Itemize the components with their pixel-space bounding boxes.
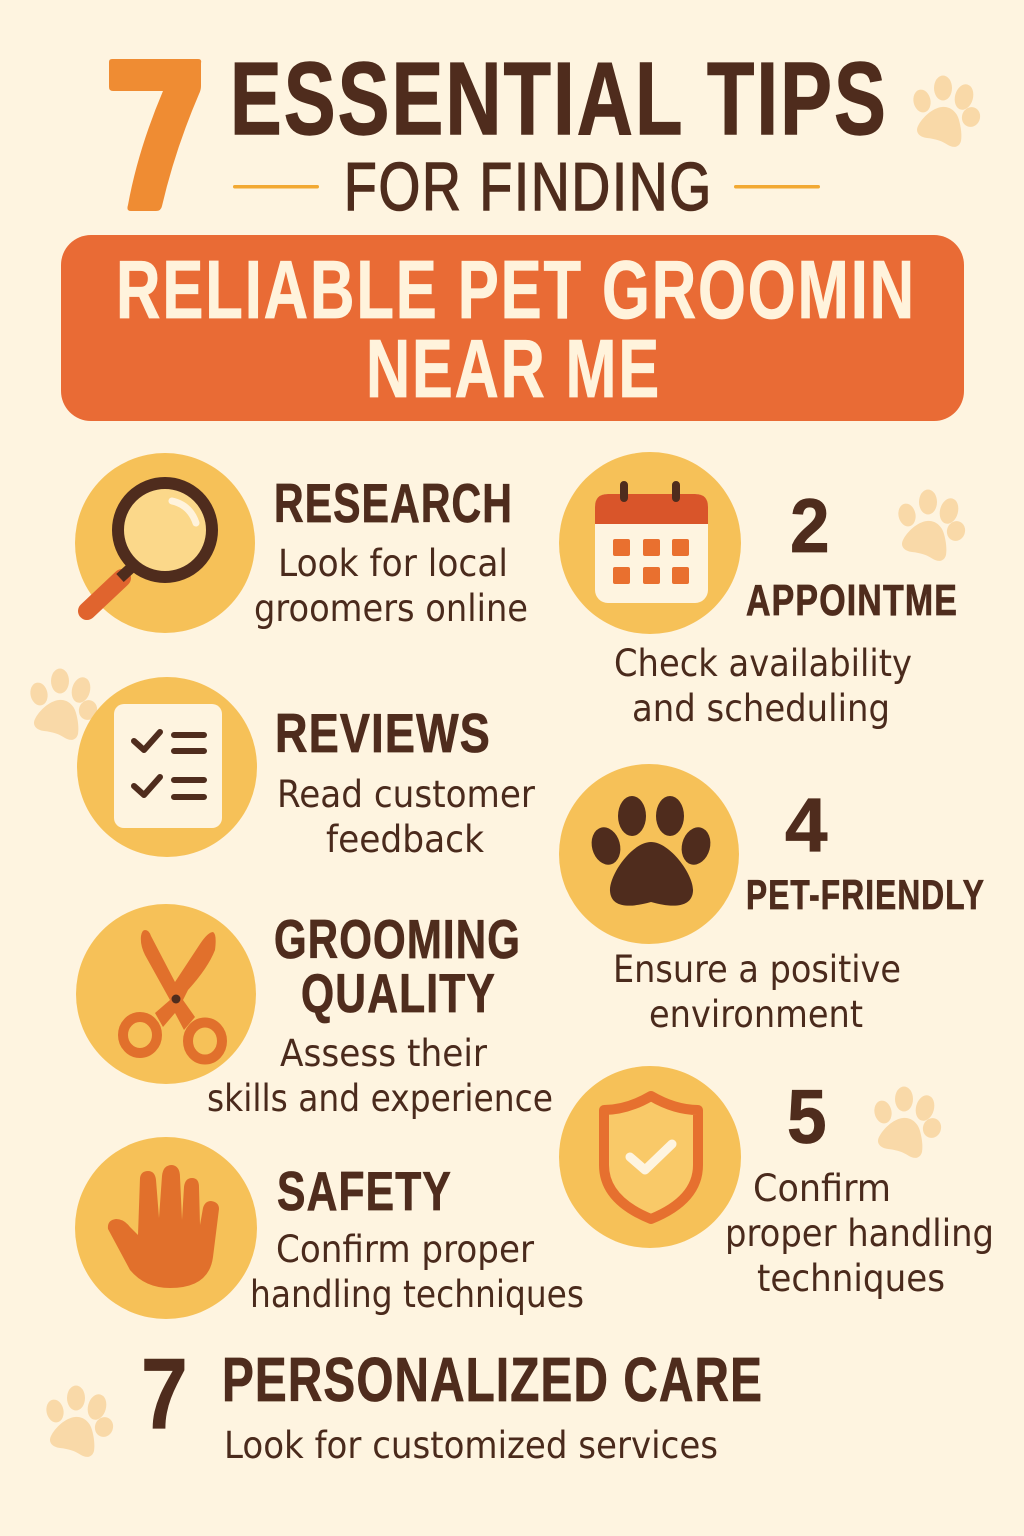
- description: Check availability: [614, 642, 912, 685]
- description: techniques: [757, 1257, 945, 1300]
- tip 4: pet-friendly: [559, 764, 985, 1036]
- heading: RESEARCH: [274, 472, 513, 534]
- tip: safety: [75, 1137, 584, 1319]
- subtitle: for finding: FOR FINDING: [344, 149, 713, 225]
- description: Confirm proper: [276, 1228, 535, 1271]
- decorative paw: right top: [896, 490, 968, 561]
- icon: hand: [75, 1137, 257, 1319]
- number: 4: [785, 783, 829, 868]
- number: 7: [141, 1338, 189, 1450]
- description: skills and experience: [207, 1077, 553, 1120]
- icon: checklist: [77, 677, 257, 857]
- big orange numeral 7: [109, 59, 201, 211]
- heading: APPOINTME: [746, 576, 958, 625]
- tip: grooming quality: QUALITY: [301, 962, 496, 1024]
- description: feedback: [326, 818, 485, 861]
- icon: shield: [559, 1066, 741, 1248]
- icon: calendar: [559, 452, 741, 634]
- tip 2: appointment: [559, 452, 958, 730]
- icon: scissors: [76, 904, 256, 1084]
- heading: GROOMING: [274, 908, 521, 970]
- description: handling techniques: [250, 1273, 584, 1316]
- banner: reliable pet grooming near me: NEAR ME: [366, 322, 661, 415]
- description: and scheduling: [632, 687, 890, 730]
- description: environment: [649, 993, 863, 1036]
- description: Ensure a positive: [613, 948, 901, 991]
- description: Assess their: [280, 1032, 488, 1075]
- number: 5: [787, 1075, 828, 1160]
- tip: grooming quality: [76, 904, 553, 1120]
- description: proper handling: [725, 1212, 994, 1255]
- decorative paw: right lower: [872, 1086, 944, 1158]
- heading: REVIEWS: [275, 702, 491, 764]
- description: Look for customized services: [224, 1424, 718, 1467]
- tip: research: [75, 453, 528, 633]
- decorative paw: bottom left: [44, 1386, 116, 1457]
- decorative paw: title: [911, 76, 983, 147]
- heading: PERSONALIZED CARE: [222, 1346, 763, 1415]
- decorative paw: left middle: [28, 668, 100, 740]
- heading: SAFETY: [277, 1160, 452, 1222]
- tip 5: handling: [559, 1066, 994, 1300]
- description: groomers online: [254, 587, 528, 630]
- number: 2: [790, 484, 831, 569]
- icon: magnifying glass: [75, 453, 255, 633]
- description: Confirm: [753, 1167, 891, 1210]
- banner: reliable pet grooming near me: [61, 235, 964, 421]
- icon: paw: [559, 764, 739, 944]
- tip: reviews: [77, 677, 536, 861]
- description: Read customer: [277, 773, 536, 816]
- description: Look for local: [278, 542, 508, 585]
- tip 7: personalized care: [141, 1338, 763, 1467]
